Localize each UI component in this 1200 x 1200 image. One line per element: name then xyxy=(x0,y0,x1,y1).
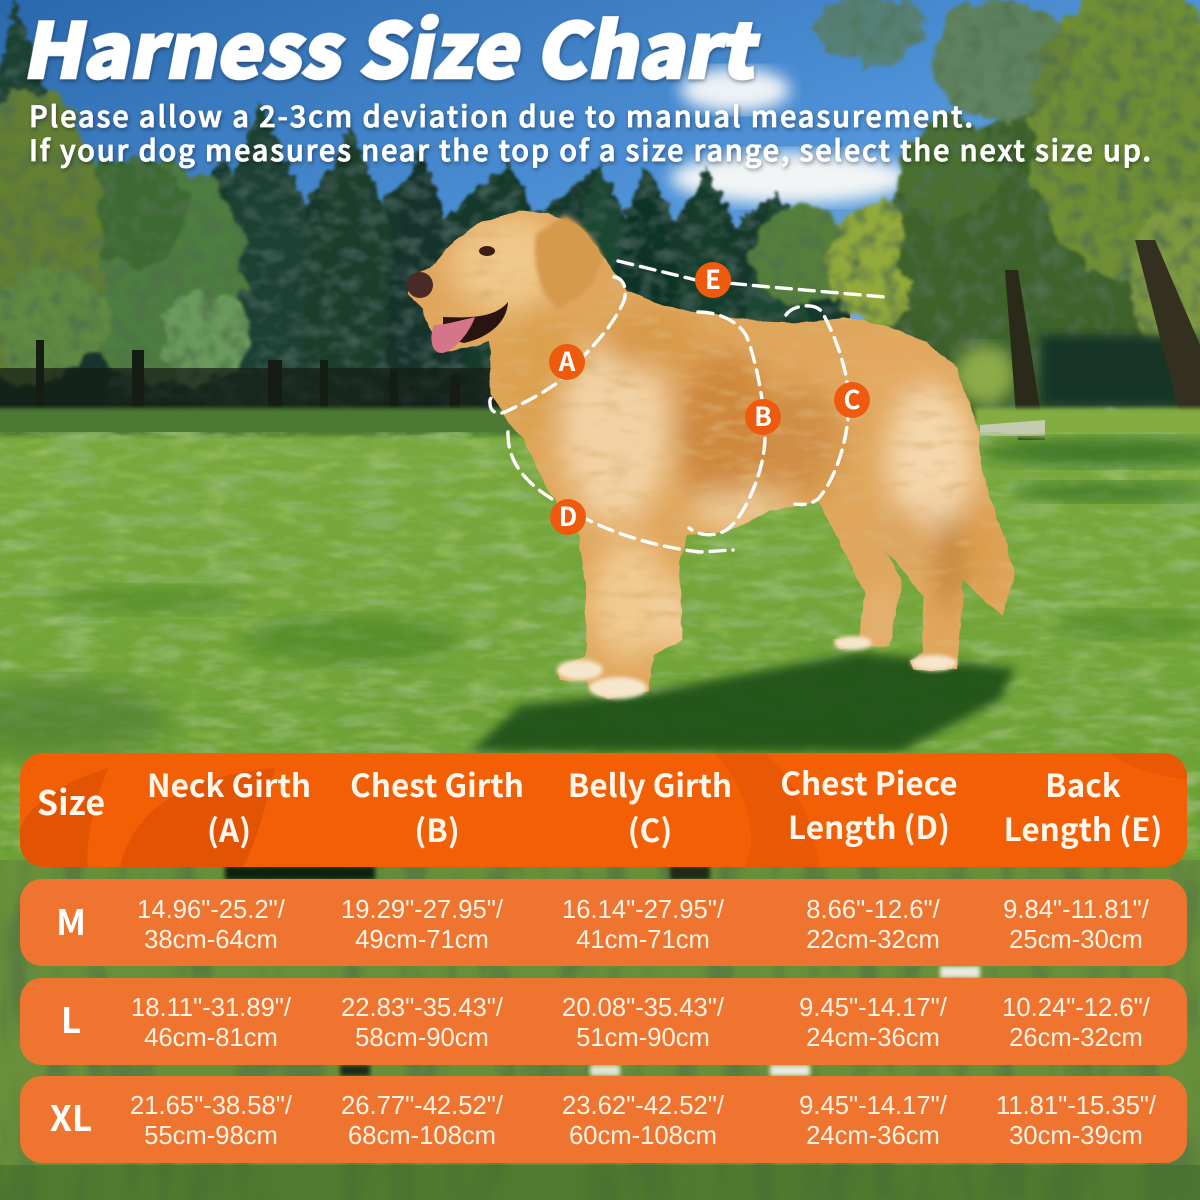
row M: 38cm-64cm xyxy=(144,926,278,954)
row XL: 60cm-108cm xyxy=(569,1122,717,1150)
line E: back length xyxy=(618,261,885,297)
row XL: 9.45"-14.17"/ xyxy=(799,1092,948,1120)
background: left trees xyxy=(0,90,250,390)
marker D xyxy=(550,497,586,535)
row M: 41cm-71cm xyxy=(576,926,710,954)
table header row xyxy=(20,753,1187,867)
dog ear xyxy=(535,215,603,310)
header labels: Size xyxy=(37,776,105,825)
background: right trees xyxy=(750,0,1200,420)
header labels: Back xyxy=(1045,761,1121,807)
marker A: A xyxy=(558,342,576,379)
background: blurred foreground behind table xyxy=(0,860,1200,1200)
row XL: 68cm-108cm xyxy=(348,1122,496,1150)
header labels: Chest Piece xyxy=(780,759,958,805)
row XL: XL xyxy=(50,1091,92,1142)
row L: 51cm-90cm xyxy=(576,1024,710,1052)
header labels: (B) xyxy=(414,806,460,852)
row XL: 11.81"-15.35"/ xyxy=(996,1092,1157,1120)
marker D: D xyxy=(559,497,577,534)
row M: 9.84"-11.81"/ xyxy=(1003,896,1150,924)
line D: chest piece length xyxy=(508,432,733,552)
row L: 20.08"-35.43"/ xyxy=(562,994,725,1022)
line C: belly girth xyxy=(786,306,849,504)
line A: neck girth xyxy=(490,277,625,413)
row L: 46cm-81cm xyxy=(144,1024,278,1052)
marker A xyxy=(549,342,585,380)
row M: 25cm-30cm xyxy=(1009,926,1143,954)
row XL: 23.62"-42.52"/ xyxy=(562,1092,725,1120)
row M: 16.14"-27.95"/ xyxy=(562,896,725,924)
header labels: Belly Girth xyxy=(568,761,732,807)
row L: 24cm-36cm xyxy=(806,1024,940,1052)
header labels xyxy=(37,759,1162,852)
marker B xyxy=(745,397,781,435)
row XL: 30cm-39cm xyxy=(1009,1122,1143,1150)
dog illustration xyxy=(400,200,1030,710)
row XL: 21.65"-38.58"/ xyxy=(130,1092,293,1120)
measurement guide lines xyxy=(490,261,885,552)
row XL: 55cm-98cm xyxy=(144,1122,278,1150)
row L: 22.83"-35.43"/ xyxy=(341,994,504,1022)
row L: 18.11"-31.89"/ xyxy=(131,994,292,1022)
header labels: Neck Girth xyxy=(147,761,311,807)
row XL xyxy=(20,1076,1187,1163)
row XL: 26.77"-42.52"/ xyxy=(341,1092,504,1120)
marker E xyxy=(695,260,731,298)
background: grass texture xyxy=(0,432,1200,868)
header labels: (C) xyxy=(628,806,672,852)
subtitle note xyxy=(29,94,1151,170)
background: tree trunks xyxy=(0,240,1200,440)
row M: 49cm-71cm xyxy=(355,926,489,954)
marker E: E xyxy=(705,260,721,297)
row L: 9.45"-14.17"/ xyxy=(799,994,948,1022)
marker C: C xyxy=(843,380,861,417)
row M: 19.29"-27.95"/ xyxy=(341,896,504,924)
row M: 14.96"-25.2"/ xyxy=(137,896,286,924)
line B: chest girth xyxy=(689,312,765,535)
header labels: Chest Girth xyxy=(350,761,524,807)
subtitle note: Please allow a 2-3cm deviation due to manual measurement. xyxy=(29,94,973,136)
header labels: Length (E) xyxy=(1004,805,1162,851)
background: pine forest xyxy=(0,0,850,420)
row M xyxy=(20,879,1187,966)
row M: 22cm-32cm xyxy=(806,926,940,954)
row L xyxy=(20,978,1187,1065)
marker C xyxy=(834,380,870,418)
marker B: B xyxy=(754,397,772,434)
background: dog shadow xyxy=(470,652,1015,752)
row XL: 24cm-36cm xyxy=(806,1122,940,1150)
header labels: Length (D) xyxy=(788,803,950,849)
dog face xyxy=(407,246,508,353)
row L: 26cm-32cm xyxy=(1009,1024,1143,1052)
row L: L xyxy=(61,993,81,1044)
row M: 8.66"-12.6"/ xyxy=(806,896,941,924)
row L: 10.24"-12.6"/ xyxy=(1002,994,1151,1022)
dog paws xyxy=(557,636,957,699)
header labels: (A) xyxy=(207,806,251,852)
subtitle note: If your dog measures near the top of a size range, select the next size up. xyxy=(29,128,1151,170)
row L: 58cm-90cm xyxy=(355,1024,489,1052)
row M: M xyxy=(56,895,86,946)
